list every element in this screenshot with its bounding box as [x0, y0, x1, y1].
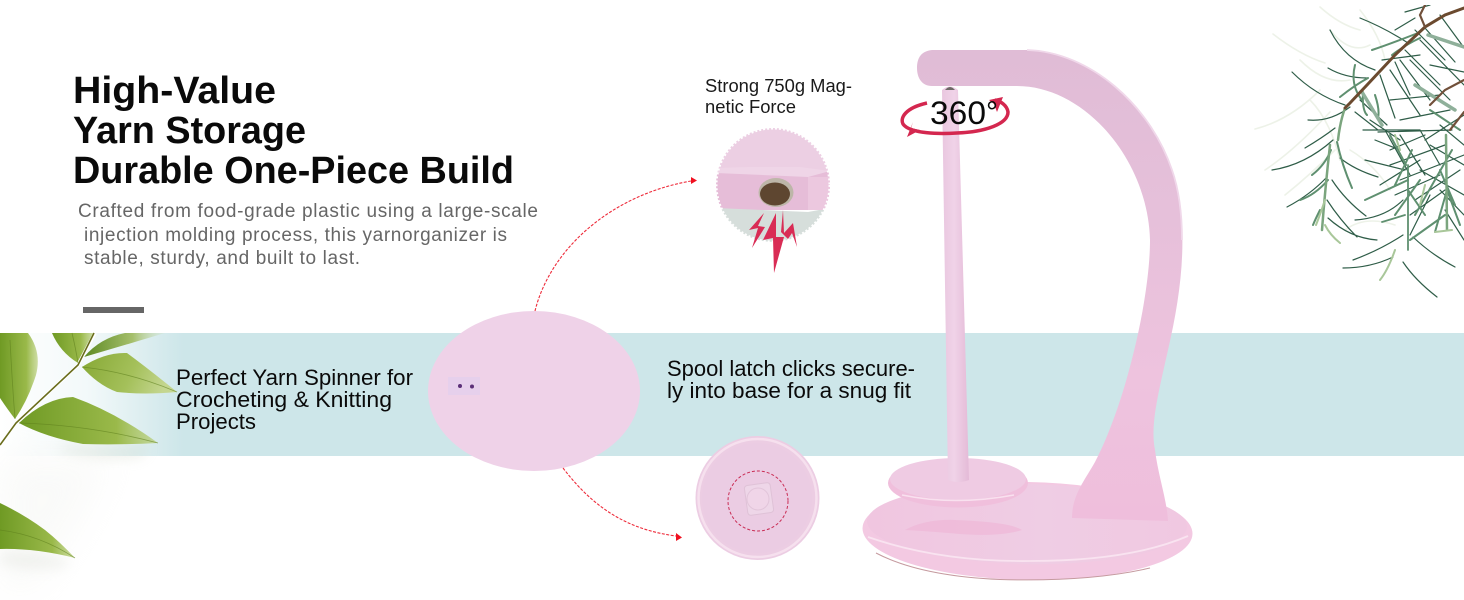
icon: 360 rotation arrow: °	[986, 96, 998, 129]
icon: 360 rotation arrow	[902, 95, 1008, 137]
text: yarn spinner note: Projects	[176, 409, 256, 434]
text: yarn spinner note: Crocheting & Knitting	[176, 387, 392, 412]
arm highlight	[1027, 50, 1182, 240]
product: yarn holder	[862, 50, 1193, 583]
ghost shadow needles	[1255, 7, 1395, 230]
icon: rosemary sprig	[1255, 5, 1464, 297]
pivot tip	[945, 87, 955, 90]
curved arm	[917, 50, 1182, 521]
icon: 360 rotation arrow: 360	[930, 95, 986, 131]
mid needles	[1300, 33, 1460, 250]
text: magnetic force note	[705, 76, 852, 117]
icon: magnet detail	[715, 127, 831, 245]
title: Durable One-Piece Build	[73, 150, 514, 192]
callout: pink ellipse	[428, 311, 640, 471]
description text: injection molding process, this yarnorganizer is	[84, 225, 507, 246]
base plate	[862, 479, 1193, 583]
text: yarn spinner note	[176, 365, 413, 434]
text: spool latch note: Spool latch clicks secure-	[667, 356, 915, 381]
icon: spool disc	[696, 436, 820, 560]
title: High-Value	[73, 70, 276, 112]
text: spool latch note	[667, 356, 915, 403]
text: spool latch note: ly into base for a snug fit	[667, 378, 912, 403]
description text: Crafted from food-grade plastic using a large-scale	[78, 201, 538, 222]
text: magnetic force note: netic Force	[705, 97, 796, 117]
accent bar	[83, 307, 144, 313]
description text	[78, 201, 538, 269]
panel: teal band	[0, 333, 1464, 456]
icon: small two-dot thumbnail	[448, 377, 480, 395]
light needles	[1316, 135, 1452, 280]
arrow: to magnet	[535, 177, 697, 311]
description text: stable, sturdy, and built to last.	[84, 248, 360, 269]
woody stems	[1345, 8, 1464, 108]
wide silver needles	[1362, 35, 1464, 125]
arrow: to spool disc	[563, 468, 682, 541]
icon: lightning bolts	[749, 210, 797, 273]
text: magnetic force note: Strong 750g Mag-	[705, 76, 852, 96]
spinner pole	[942, 86, 969, 482]
small disc	[888, 458, 1028, 508]
icon: left leaves	[0, 333, 177, 590]
text: yarn spinner note: Perfect Yarn Spinner for	[176, 365, 413, 390]
title	[73, 70, 514, 192]
dark needles	[1272, 5, 1464, 297]
title: Yarn Storage	[73, 110, 306, 152]
